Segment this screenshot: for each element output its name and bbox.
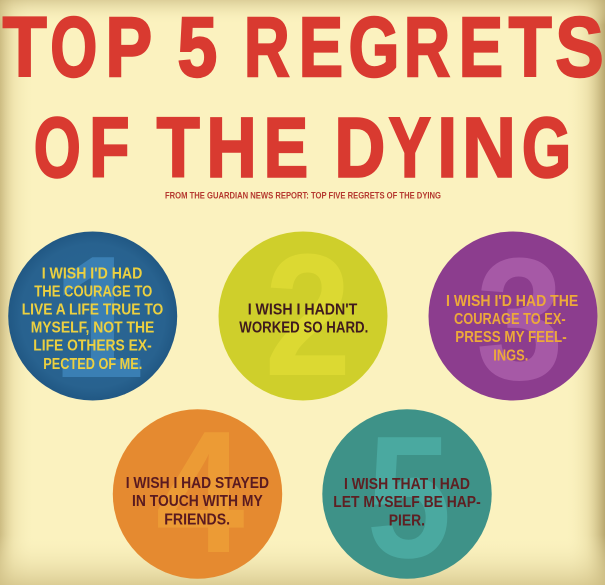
numeral 3: 3 xyxy=(476,221,564,416)
regret 5 text xyxy=(333,476,481,530)
regret 1 text xyxy=(22,266,163,373)
regret 3 text xyxy=(446,293,579,364)
title: E xyxy=(264,100,308,194)
regret 1 text: PECTED OF ME. xyxy=(43,356,142,373)
title: H xyxy=(206,100,257,194)
regret 4 text: I WISH I HAD STAYED xyxy=(126,475,269,492)
regret 1 text: MYSELF, NOT THE xyxy=(31,320,155,336)
regret 3 text: INGS. xyxy=(493,348,528,364)
title: P xyxy=(106,0,152,94)
title: T xyxy=(509,0,552,94)
regret 4 text xyxy=(126,475,269,528)
regret 5 text: I WISH THAT I HAD xyxy=(344,476,470,493)
title: O xyxy=(34,100,81,194)
title: D xyxy=(334,100,385,194)
regret 5 text: PIER. xyxy=(389,512,425,530)
regret 2 text xyxy=(239,302,368,336)
title: Y xyxy=(389,100,431,194)
panel: regret 5 xyxy=(322,399,492,585)
title: I xyxy=(438,100,457,194)
title: G xyxy=(522,100,571,194)
title: G xyxy=(349,0,399,94)
numeral 4: 4 xyxy=(156,394,245,585)
regret 4 text: FRIENDS. xyxy=(164,512,230,528)
panel: regret 3 xyxy=(428,221,598,416)
numeral 2: 2 xyxy=(264,217,351,412)
regret 3 text: COURAGE TO EX- xyxy=(454,311,566,328)
panel: regret 4 xyxy=(113,394,282,585)
regret 5 text: LET MYSELF BE HAP- xyxy=(333,494,481,511)
title: T xyxy=(3,0,47,94)
title xyxy=(3,0,604,194)
title: T xyxy=(157,100,200,194)
title: O xyxy=(50,0,97,94)
regret 4 text: IN TOUCH WITH MY xyxy=(132,493,263,510)
regret 3 text: PRESS MY FEEL- xyxy=(455,329,567,346)
regret 2 text: WORKED SO HARD. xyxy=(239,320,368,336)
regret 2 text: I WISH I HADN'T xyxy=(248,302,358,318)
numeral 1: 1 xyxy=(52,219,145,414)
regret 1 text: LIVE A LIFE TRUE TO xyxy=(22,302,163,318)
regret 1 text: I WISH I'D HAD xyxy=(42,266,142,282)
regret 1 text: THE COURAGE TO xyxy=(34,284,152,300)
subtitle: FROM THE GUARDIAN NEWS REPORT: TOP FIVE REGRETS OF THE DYING xyxy=(165,190,441,202)
regret 1 text: LIFE OTHERS EX- xyxy=(33,338,152,354)
title: E xyxy=(299,0,343,94)
regret 3 text: I WISH I'D HAD THE xyxy=(446,293,579,310)
title: F xyxy=(89,100,130,194)
panel: regret 2 xyxy=(218,217,388,412)
title: N xyxy=(462,100,516,194)
title: E xyxy=(459,0,503,94)
title: R xyxy=(244,0,290,94)
title: 5 xyxy=(178,0,217,94)
panel: regret 1 xyxy=(8,219,177,414)
title: R xyxy=(404,0,450,94)
